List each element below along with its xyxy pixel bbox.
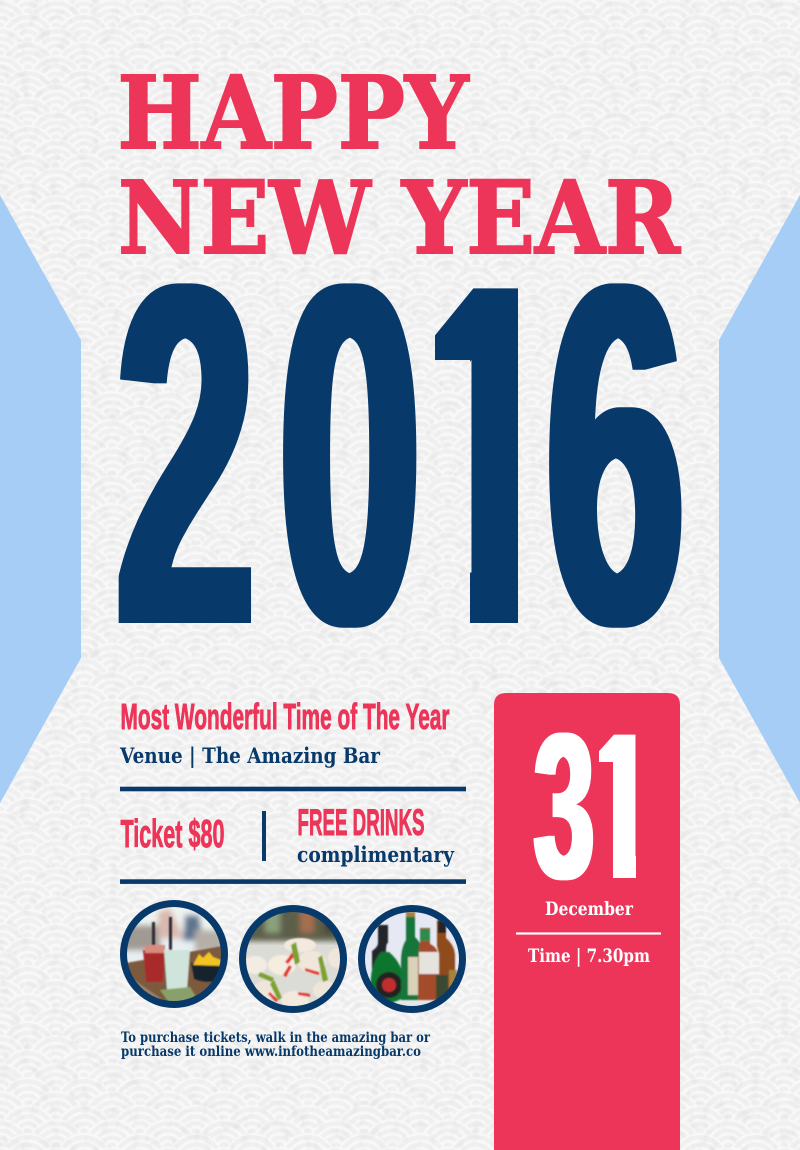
large year 2016: 1 <box>418 185 560 726</box>
large year 2016: 6 <box>546 183 684 726</box>
large year 2016: 0 <box>279 184 421 726</box>
date panel <box>494 690 680 1150</box>
large year 2016: 2 <box>116 184 255 726</box>
time divider <box>516 932 661 935</box>
event time: Time | 7.30pm <box>528 946 650 967</box>
right light-blue side shape <box>719 195 800 803</box>
date number 31: 1 <box>588 690 655 922</box>
title: Happy New Year: HAPPY <box>118 54 470 172</box>
date number 31: 3 <box>534 691 594 921</box>
heading: most wonderful time: Most Wonderful Time of The Year <box>120 696 450 737</box>
large year 2016 <box>118 283 682 628</box>
month: December <box>545 899 633 920</box>
upper divider <box>120 787 466 791</box>
vertical separator <box>262 811 266 861</box>
purchase note <box>121 1030 431 1060</box>
title: Happy New Year <box>118 54 681 277</box>
ticket price: Ticket $80 <box>120 813 224 856</box>
title: Happy New Year: NEW YEAR <box>118 159 681 277</box>
complimentary label: complimentary <box>297 842 455 867</box>
date number 31 <box>534 732 636 880</box>
photo: cocktails on a table <box>120 900 230 1010</box>
free drinks: FREE DRINKS <box>298 802 424 843</box>
purchase note: To purchase tickets, walk in the amazing bar or <box>121 1030 431 1046</box>
photo: plated appetisers <box>240 905 348 1015</box>
photo: liquor bottles <box>358 905 466 1015</box>
lower divider <box>120 879 466 884</box>
venue line: Venue | The Amazing Bar <box>119 743 381 768</box>
purchase note: purchase it online www.infotheamazingbar.co <box>121 1044 421 1060</box>
left light-blue side shape <box>0 195 81 803</box>
